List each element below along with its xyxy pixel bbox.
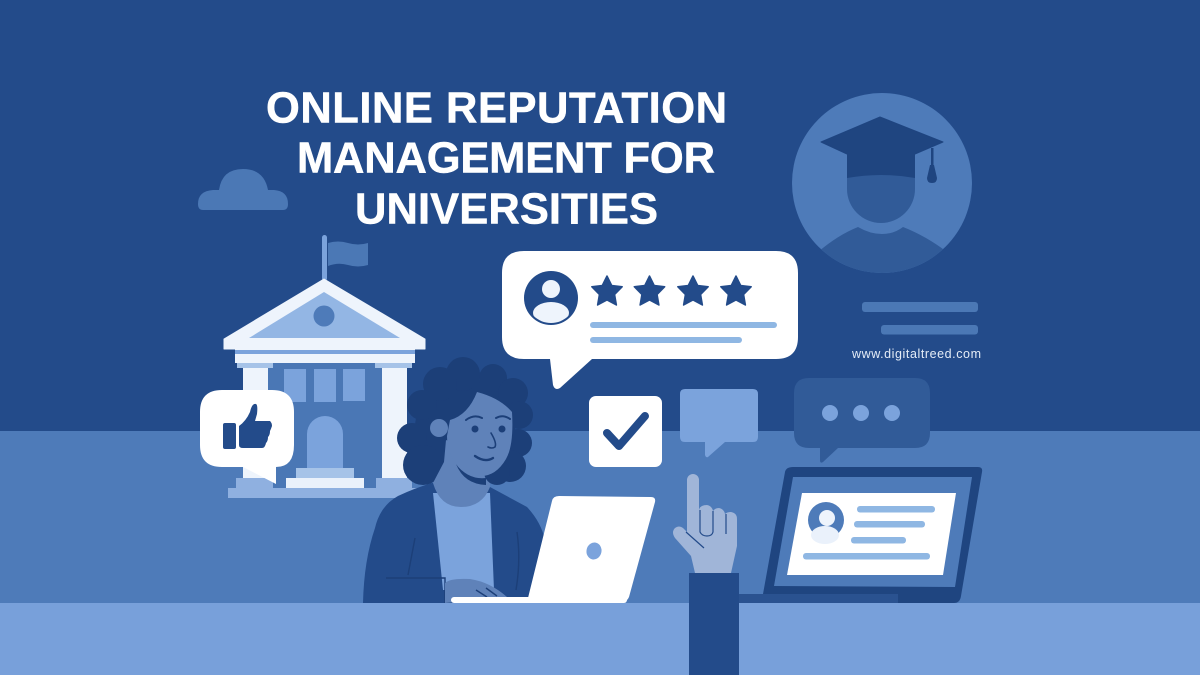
cap crown xyxy=(847,150,915,178)
lower right hair xyxy=(456,450,526,485)
profile lines xyxy=(803,506,935,560)
hair xyxy=(397,357,533,485)
stars xyxy=(592,276,751,305)
profile avatar xyxy=(808,502,844,544)
flag xyxy=(322,235,368,281)
jacket lines xyxy=(386,532,519,603)
cap board xyxy=(821,117,943,154)
roof xyxy=(224,279,425,349)
body xyxy=(822,227,943,273)
ear xyxy=(430,419,448,437)
columns xyxy=(237,363,412,478)
laptop xyxy=(451,496,655,603)
steps xyxy=(286,468,364,488)
icon: checkbox xyxy=(589,396,662,467)
icon: typing bubble xyxy=(794,378,930,463)
face xyxy=(447,392,512,476)
head xyxy=(847,170,915,223)
icon: thumbs up bubble xyxy=(200,390,294,484)
title xyxy=(266,84,727,234)
door xyxy=(307,416,343,468)
title: UNIVERSITIES xyxy=(355,186,658,234)
jacket xyxy=(363,483,545,603)
eyes and brows xyxy=(466,416,510,460)
icon: light speech bubble xyxy=(680,389,758,457)
woman at laptop xyxy=(363,357,655,603)
background: dark wall xyxy=(0,0,1200,431)
icon: cloud xyxy=(198,169,288,210)
tassel xyxy=(927,148,937,183)
avatar xyxy=(524,271,578,325)
neck xyxy=(433,440,490,507)
hand xyxy=(445,579,507,603)
background: mid band xyxy=(0,431,1200,603)
text lines xyxy=(590,322,777,343)
decorative text lines xyxy=(862,302,978,334)
right laptop xyxy=(738,467,982,603)
review bubble xyxy=(502,251,798,389)
graduate avatar xyxy=(792,93,972,290)
entablature xyxy=(235,349,415,363)
icon: university building xyxy=(224,235,425,498)
website url: www.digitaltreed.com xyxy=(851,347,981,361)
pointing hand xyxy=(673,474,739,675)
sleeve xyxy=(689,573,739,675)
wall xyxy=(262,360,386,488)
base xyxy=(228,478,418,498)
title: MANAGEMENT FOR xyxy=(297,134,715,182)
shirt xyxy=(433,493,494,590)
windows xyxy=(284,369,365,402)
background: desk xyxy=(0,603,1200,675)
title: ONLINE REPUTATION xyxy=(266,84,727,132)
